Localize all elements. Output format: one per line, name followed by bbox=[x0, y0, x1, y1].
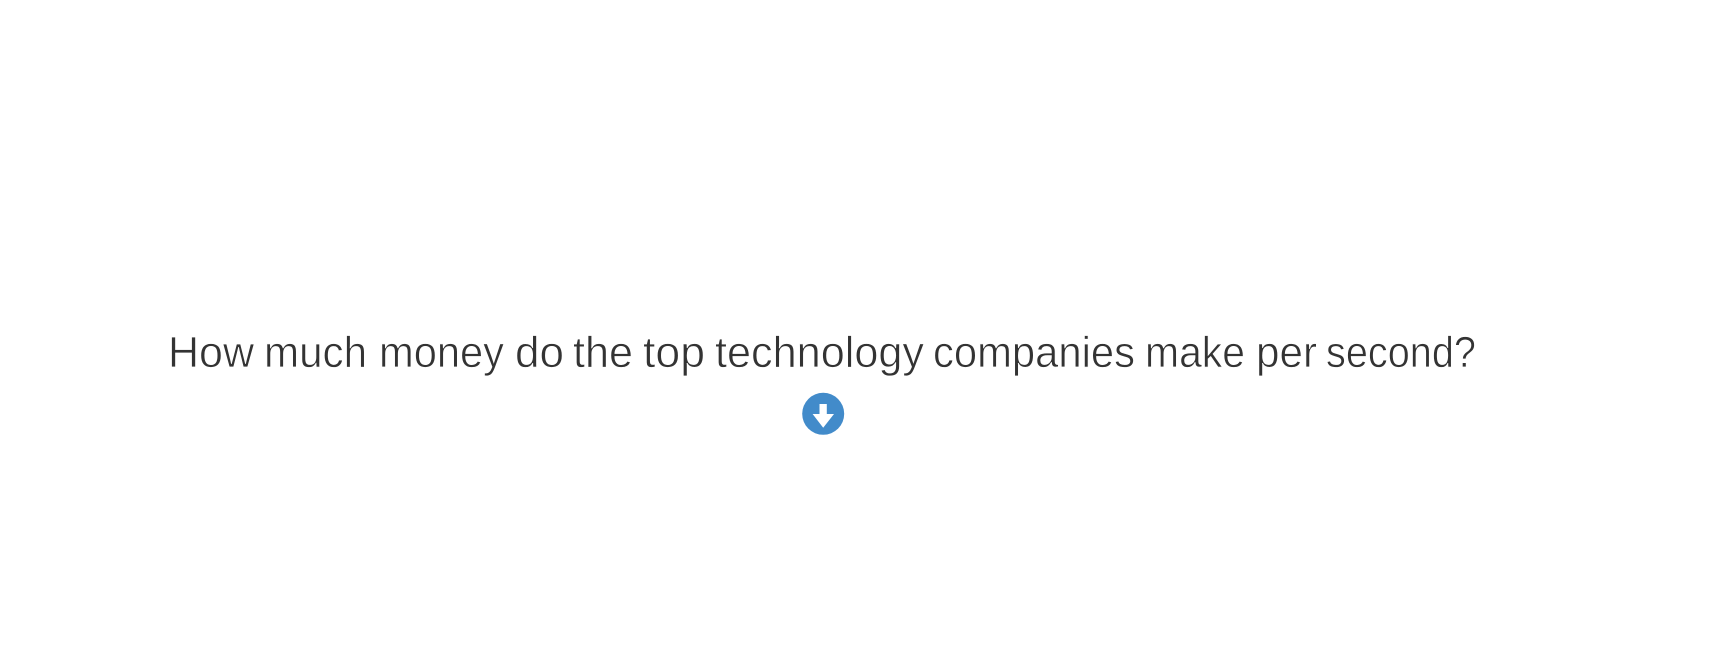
title: money bbox=[379, 328, 504, 377]
icon: down arrow in blue circle bbox=[802, 393, 844, 435]
title bbox=[168, 328, 1476, 377]
title: companies bbox=[933, 328, 1135, 377]
title: the bbox=[573, 328, 633, 377]
title: How bbox=[168, 328, 254, 377]
title: do bbox=[515, 328, 564, 377]
title: per bbox=[1256, 328, 1317, 377]
title: second? bbox=[1326, 328, 1476, 377]
title: much bbox=[264, 328, 367, 377]
title: top bbox=[643, 328, 705, 377]
title: technology bbox=[715, 328, 924, 377]
title: make bbox=[1145, 328, 1245, 377]
